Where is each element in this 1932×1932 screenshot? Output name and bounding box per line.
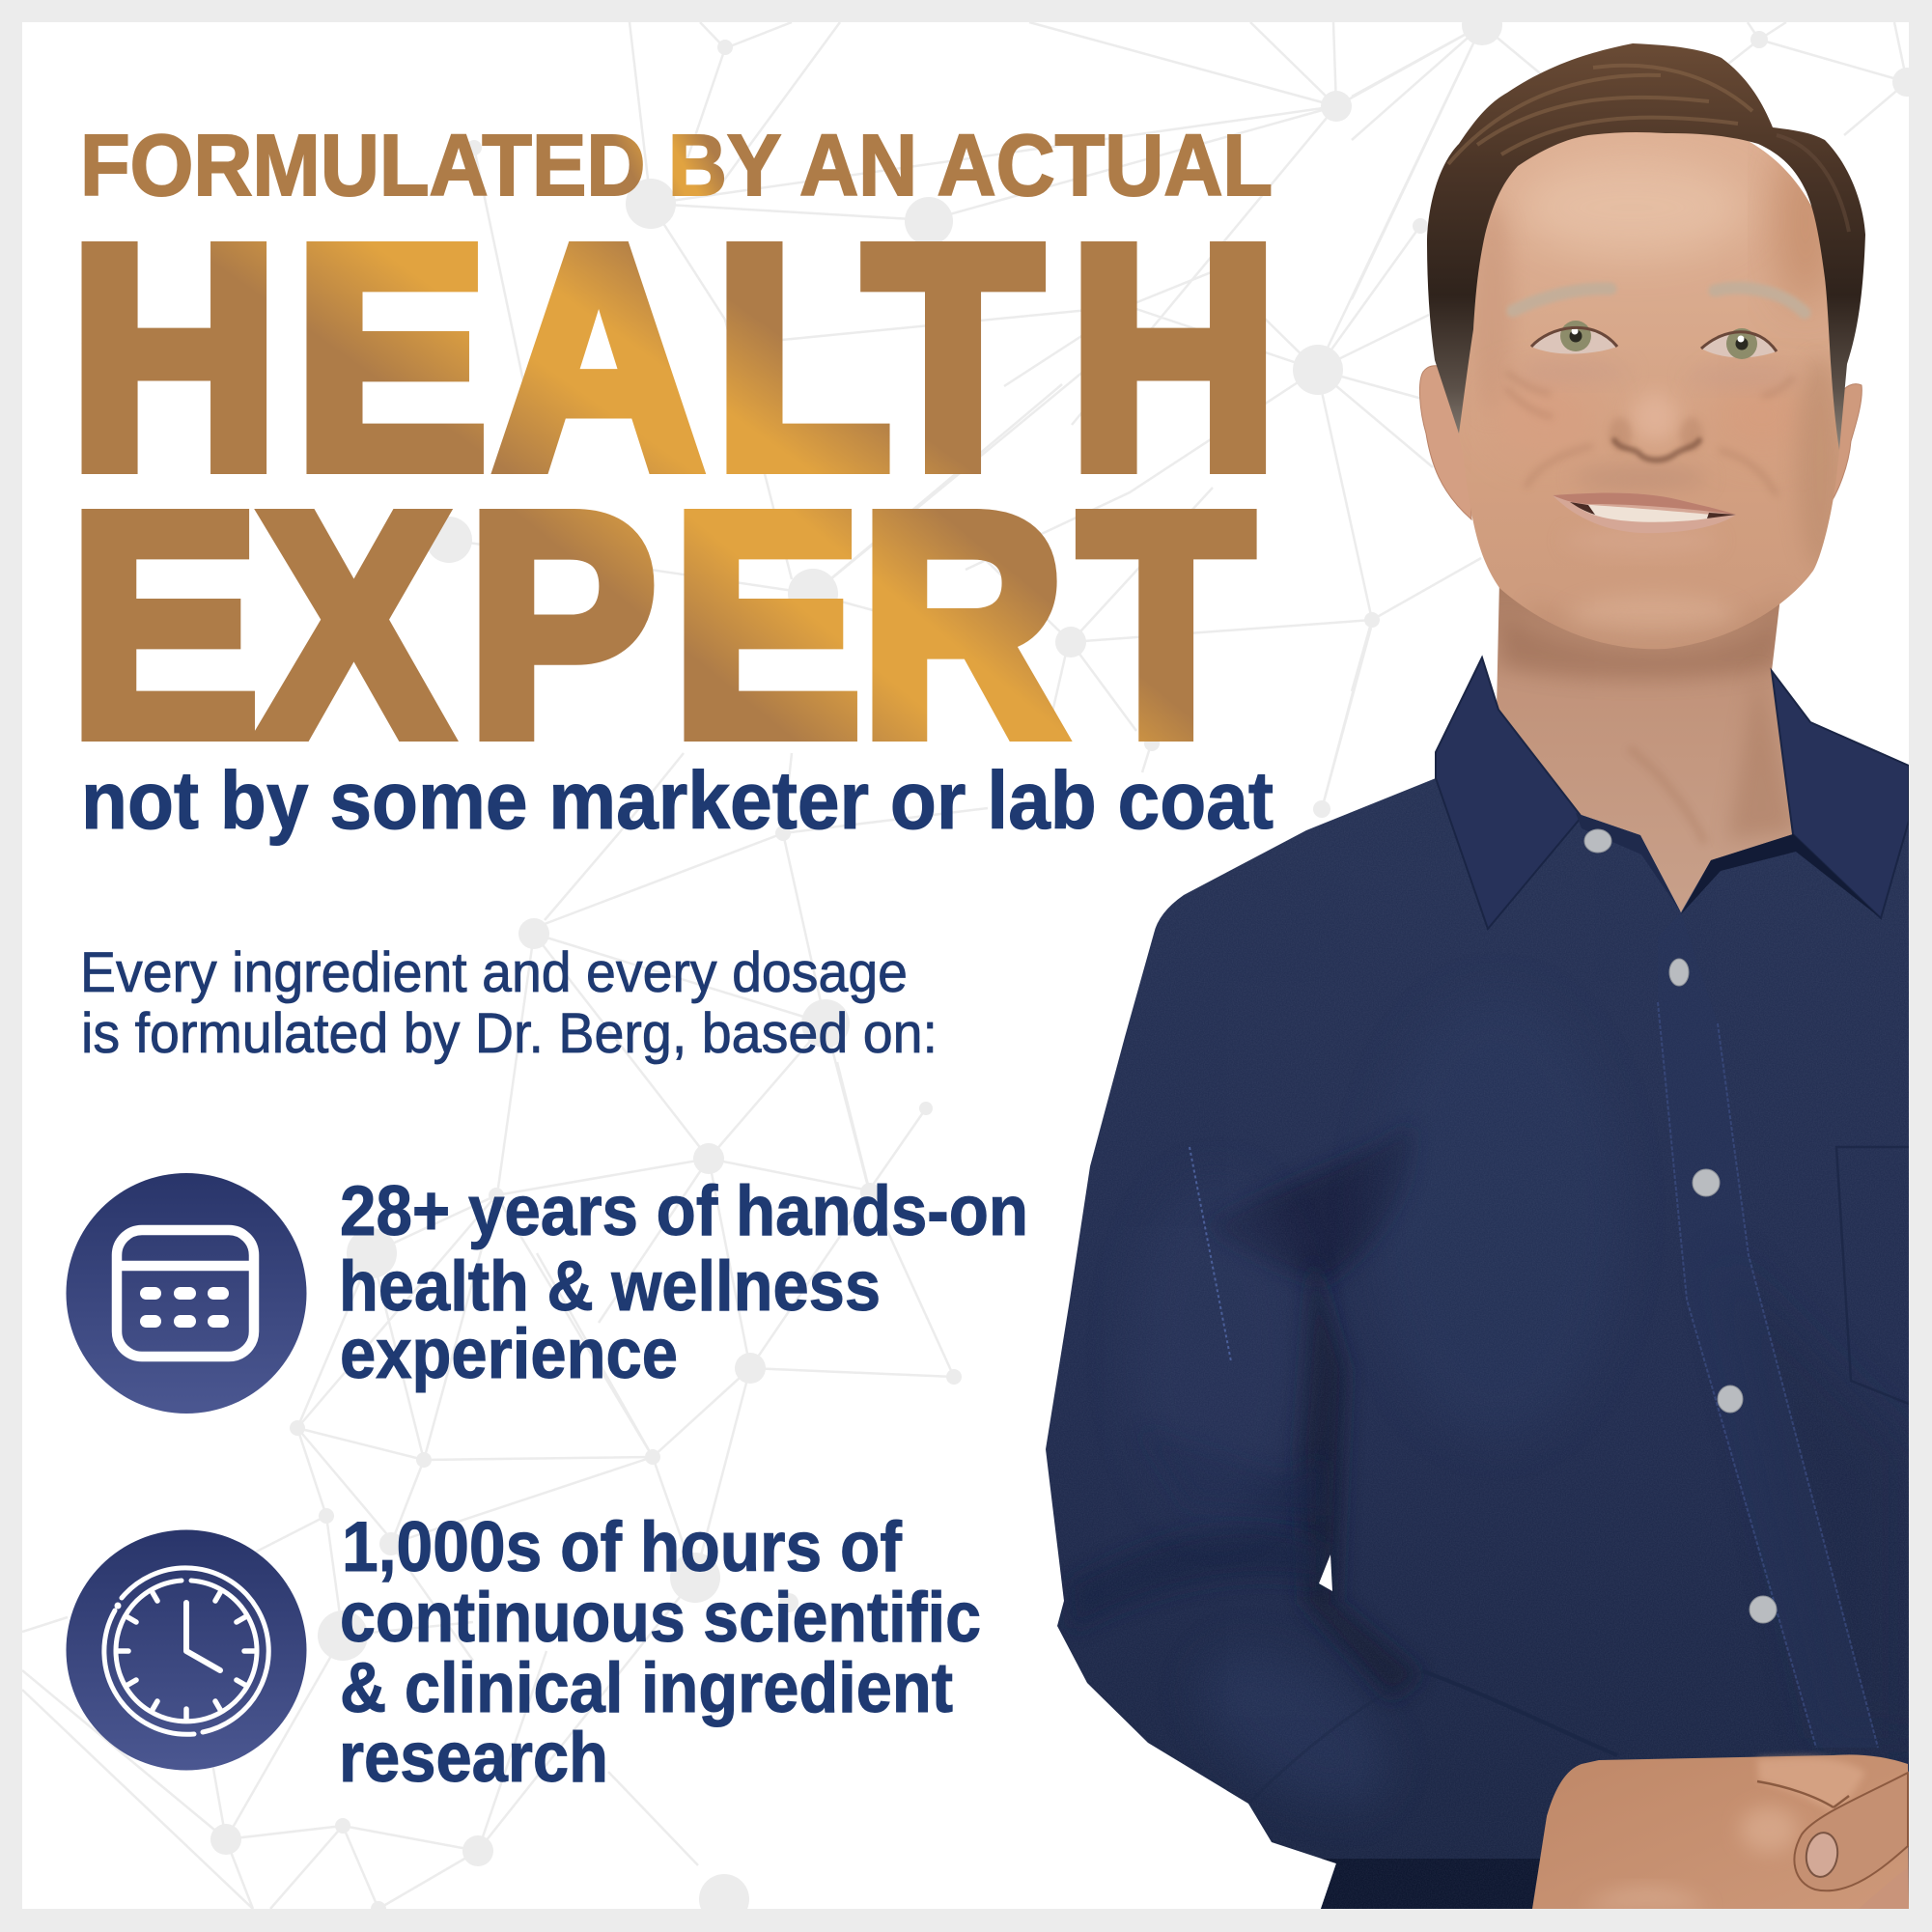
face [1439,116,1839,649]
hair [1427,43,1865,450]
text: hours of research: 1,000s of hours of [342,1508,903,1586]
fabric texture [1047,786,1909,1909]
text: years of experience: health & wellness [339,1247,881,1326]
heading: formulated by an actual: FORMULATED BY AN ACTUAL [80,118,1273,214]
subheading: not by some marketer or lab coat: not by some marketer or lab coat [81,755,1274,846]
eye left [1531,321,1617,354]
text: hours of research: & clinical ingredient [340,1649,953,1727]
intro text block [80,941,938,1065]
pocket [1836,1147,1909,1404]
shirt body [1046,778,1909,1909]
text: years of experience: 28+ years of hands-on [340,1172,1028,1250]
neck [1497,579,1796,912]
heading: expert: EXPERT [70,448,1253,800]
heading: health: HEALTH [70,181,1278,534]
elbow gap [1319,1554,1332,1591]
icon: calendar in circle [66,1173,307,1414]
icon: clock in circle [66,1529,307,1771]
nose [1609,392,1703,460]
brows [1513,289,1610,311]
smile and eye lines [1506,372,1794,496]
text: years of experience [339,1172,1028,1393]
text: hours of research: research [339,1719,608,1797]
cuff line [1423,1671,1617,1755]
photo illustration: man in navy shirt [1043,43,1912,1917]
hands [1532,1754,1909,1909]
text: hours of research: continuous scientific [340,1579,981,1657]
text: hours of research [339,1508,981,1797]
collar right [1772,671,1909,918]
head [1419,43,1865,657]
eye right [1701,328,1777,359]
collar stand left [1576,813,1681,912]
buttons [1584,829,1777,1623]
ears [1419,366,1471,519]
text: years of experience: experience [340,1315,678,1393]
collar left [1436,658,1582,929]
intro text block: Every ingredient and every dosage [80,941,908,1004]
intro text block: is formulated by Dr. Berg, based on: [81,1002,938,1065]
mouth [1553,493,1736,533]
placket [1658,912,1878,1748]
shadow under right collar [1681,834,1881,918]
